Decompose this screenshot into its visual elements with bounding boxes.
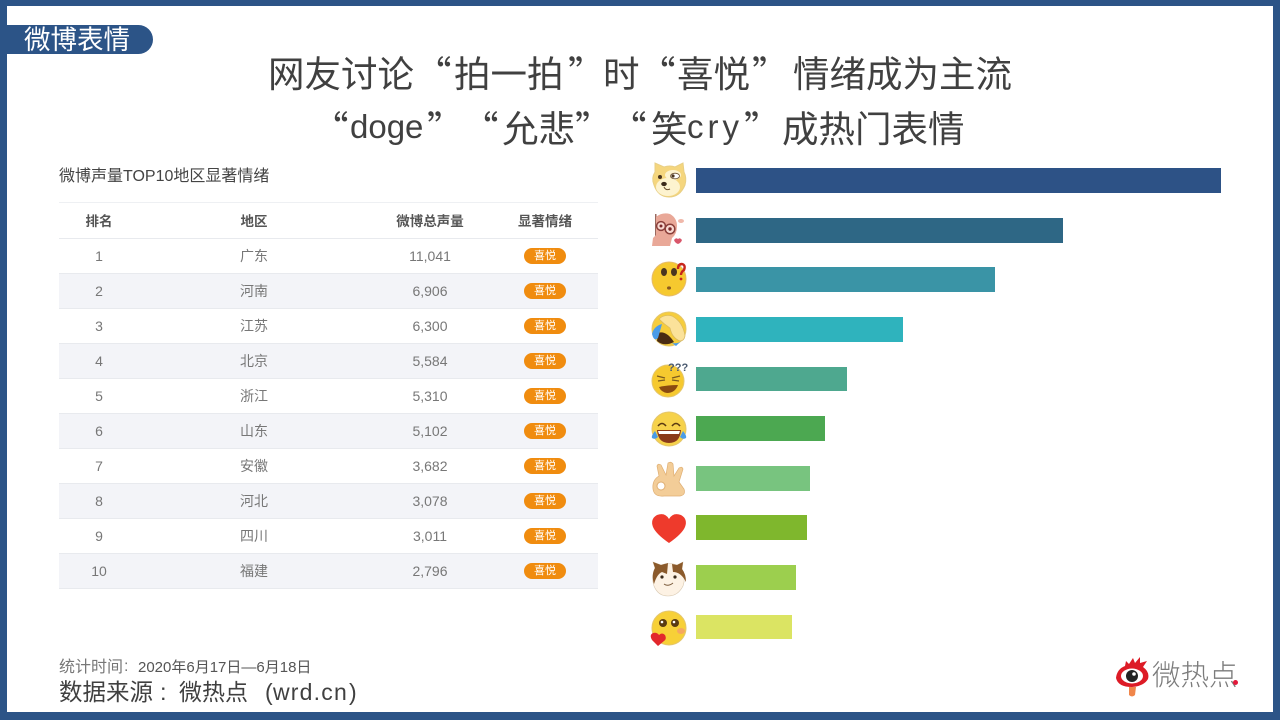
row 7: 7 [95, 458, 103, 474]
title line 2: ” [427, 100, 464, 153]
footer: data source [59, 679, 357, 705]
title [268, 45, 1012, 153]
row 10 [59, 554, 598, 589]
row 9 [59, 519, 598, 554]
row 8: 8 [95, 493, 103, 509]
row 7: 喜悦 [534, 460, 556, 472]
row 4: 北京 [240, 353, 268, 369]
row 9: 喜悦 [534, 530, 556, 542]
icon: blush with heart [651, 611, 686, 646]
logo eye mark [1116, 657, 1148, 696]
row 7 [59, 449, 598, 484]
bar 7: ok hand [696, 466, 810, 491]
row 2 [59, 274, 598, 309]
row 8: 喜悦 [534, 495, 556, 507]
table heading: 微博声量TOP10地区显著情绪 [59, 168, 269, 185]
row 4: 5,584 [412, 353, 448, 369]
row 6: 5,102 [412, 423, 448, 439]
row 6: 山东 [240, 423, 268, 439]
row 1 [59, 239, 598, 274]
table header row: 地区 [240, 214, 268, 229]
row 10: 10 [91, 563, 107, 579]
icon: 允悲 [652, 213, 684, 246]
icon: question face [652, 262, 686, 296]
row 3: 喜悦 [534, 320, 556, 332]
row 1: 喜悦 [534, 250, 556, 262]
row 3: 6,300 [412, 318, 448, 334]
row 4: 4 [95, 353, 103, 369]
title line 1: 喜悦 [677, 45, 750, 98]
title line 1: 情绪成为主流 [793, 45, 1012, 98]
footer: statistics period: 统计时间 [59, 659, 123, 676]
icon: confused laugh: ??? [668, 362, 688, 374]
bar 3: question face [696, 267, 995, 292]
table header row: 微博总声量 [396, 214, 464, 229]
row 5: 5 [95, 388, 103, 404]
row 6 [59, 414, 598, 449]
footer: data source: ( [265, 679, 273, 705]
icon: heart [652, 514, 686, 543]
table header row: 显著情绪 [518, 214, 572, 229]
footer: data source: wrd.cn [273, 679, 348, 705]
bar 6: tears of joy [696, 416, 825, 441]
icon: tears of joy [652, 412, 686, 446]
table header row: 排名 [86, 214, 112, 229]
title line 2: cry [687, 108, 743, 145]
icon: cat [653, 562, 686, 596]
row 5: 喜悦 [534, 390, 556, 402]
logo: 微热点: 微热点 [1152, 660, 1238, 692]
row 1: 11,041 [409, 248, 451, 264]
title line 1: “ [415, 45, 452, 98]
row 2: 河南 [240, 283, 268, 299]
logo red dot [1233, 680, 1238, 685]
row 10: 2,796 [412, 563, 448, 579]
icon: doge [653, 163, 686, 197]
row 3: 江苏 [240, 318, 268, 334]
title line 1: 时 [603, 45, 640, 98]
title line 1: 网友讨论 [268, 45, 414, 98]
bar 8: heart [696, 515, 807, 540]
icon: confused laugh [652, 362, 688, 397]
row 5 [59, 379, 598, 414]
footer: data source: 微热点 [179, 679, 248, 705]
footer: statistics period: 2020年6月17日—6月18日 [138, 659, 311, 676]
row 2: 喜悦 [534, 285, 556, 297]
emoji bar chart [650, 162, 1221, 646]
title line 2: ” [744, 100, 780, 153]
row 8: 3,078 [412, 493, 448, 509]
footer: data source: : [160, 679, 167, 705]
row 1: 1 [95, 248, 103, 264]
table header row [59, 202, 598, 239]
title line 2 [312, 100, 964, 153]
row 9: 9 [95, 528, 103, 544]
row 10: 喜悦 [534, 565, 556, 577]
table: top 10 regions [59, 202, 598, 589]
row 7: 安徽 [240, 458, 268, 474]
row 9: 四川 [240, 528, 268, 544]
footer: data source: 数据来源 [59, 679, 153, 705]
bar 9: cat [696, 565, 796, 590]
title line 1: “ [639, 45, 676, 98]
bar 10: blush heart [696, 615, 792, 639]
icon: ok hand [653, 462, 684, 496]
row 3: 3 [95, 318, 103, 334]
title line 2: doge [350, 108, 423, 145]
title line 1: 拍一拍 [454, 45, 564, 98]
row 5: 浙江 [240, 388, 268, 404]
footer: data source: ) [349, 679, 357, 705]
row 8: 河北 [240, 493, 268, 509]
title line 2: 允悲 [502, 100, 575, 153]
bar 2: 允悲 [696, 218, 1063, 243]
title line 2: 笑 [651, 100, 688, 153]
row 9: 3,011 [413, 528, 447, 544]
title line 1: ” [568, 45, 604, 98]
row 2: 6,906 [412, 283, 448, 299]
title line 2: 成热门表情 [782, 100, 964, 153]
row 8 [59, 484, 598, 519]
title line 1 [268, 45, 1012, 98]
row 4: 喜悦 [534, 355, 556, 367]
section tag: 微博表情: 微博表情 [24, 25, 130, 55]
title line 2: “ [312, 100, 348, 153]
title line 2: “ [610, 100, 646, 153]
row 5: 5,310 [412, 388, 448, 404]
icon: 笑cry cover face [652, 312, 686, 346]
row 6: 喜悦 [534, 425, 556, 437]
bar 4: 笑cry cover face [696, 317, 903, 342]
title line 2: ” [575, 100, 612, 153]
bar 5: confused laugh [696, 367, 847, 391]
row 2: 2 [95, 283, 103, 299]
footer: statistics period [59, 658, 311, 676]
footer: statistics period: : [124, 658, 128, 675]
bar 1: doge [696, 168, 1221, 193]
row 1: 广东 [240, 248, 268, 264]
row 10: 福建 [240, 563, 268, 579]
title line 1: ” [752, 45, 788, 98]
row 7: 3,682 [412, 458, 448, 474]
row 3 [59, 309, 598, 344]
title line 2: “ [462, 100, 498, 153]
row 6: 6 [95, 423, 103, 439]
logo: 微热点 [1116, 657, 1238, 696]
row 4 [59, 344, 598, 379]
